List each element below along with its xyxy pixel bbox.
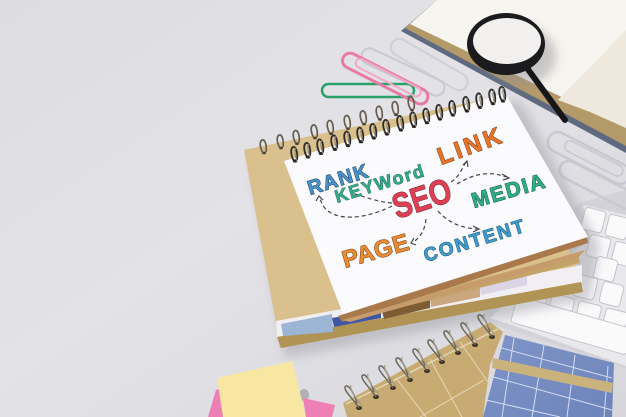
- dashed arrows: [316, 161, 509, 245]
- tan back notebook: [244, 95, 583, 348]
- spiral binding, back notebook: [260, 97, 414, 154]
- word: MEDIA: MEDIA: [469, 170, 547, 213]
- word: SEO: SEO: [387, 171, 457, 227]
- small spiral notebook, bottom: [343, 314, 503, 417]
- word: CONTENT: CONTENT: [421, 216, 527, 267]
- open notebook, top right: [401, 0, 626, 153]
- keyboard: [480, 190, 626, 368]
- blue checked notebook: [483, 335, 614, 417]
- spiral binding, front: [291, 87, 505, 163]
- word: RANK: RANK: [305, 160, 371, 200]
- paper clips, top centre: [322, 36, 471, 107]
- notebook page edges: [338, 236, 588, 322]
- white notebook page: [284, 93, 588, 314]
- sticky notes, bottom left: [208, 361, 335, 417]
- word: PAGE: PAGE: [339, 229, 412, 274]
- shadow under notebooks: [250, 100, 600, 358]
- word: LINK: LINK: [434, 122, 506, 171]
- large paper clips, right side: [544, 129, 626, 212]
- word: KEYWORD: KEYWord: [332, 161, 426, 207]
- magnifying glass: [467, 13, 565, 120]
